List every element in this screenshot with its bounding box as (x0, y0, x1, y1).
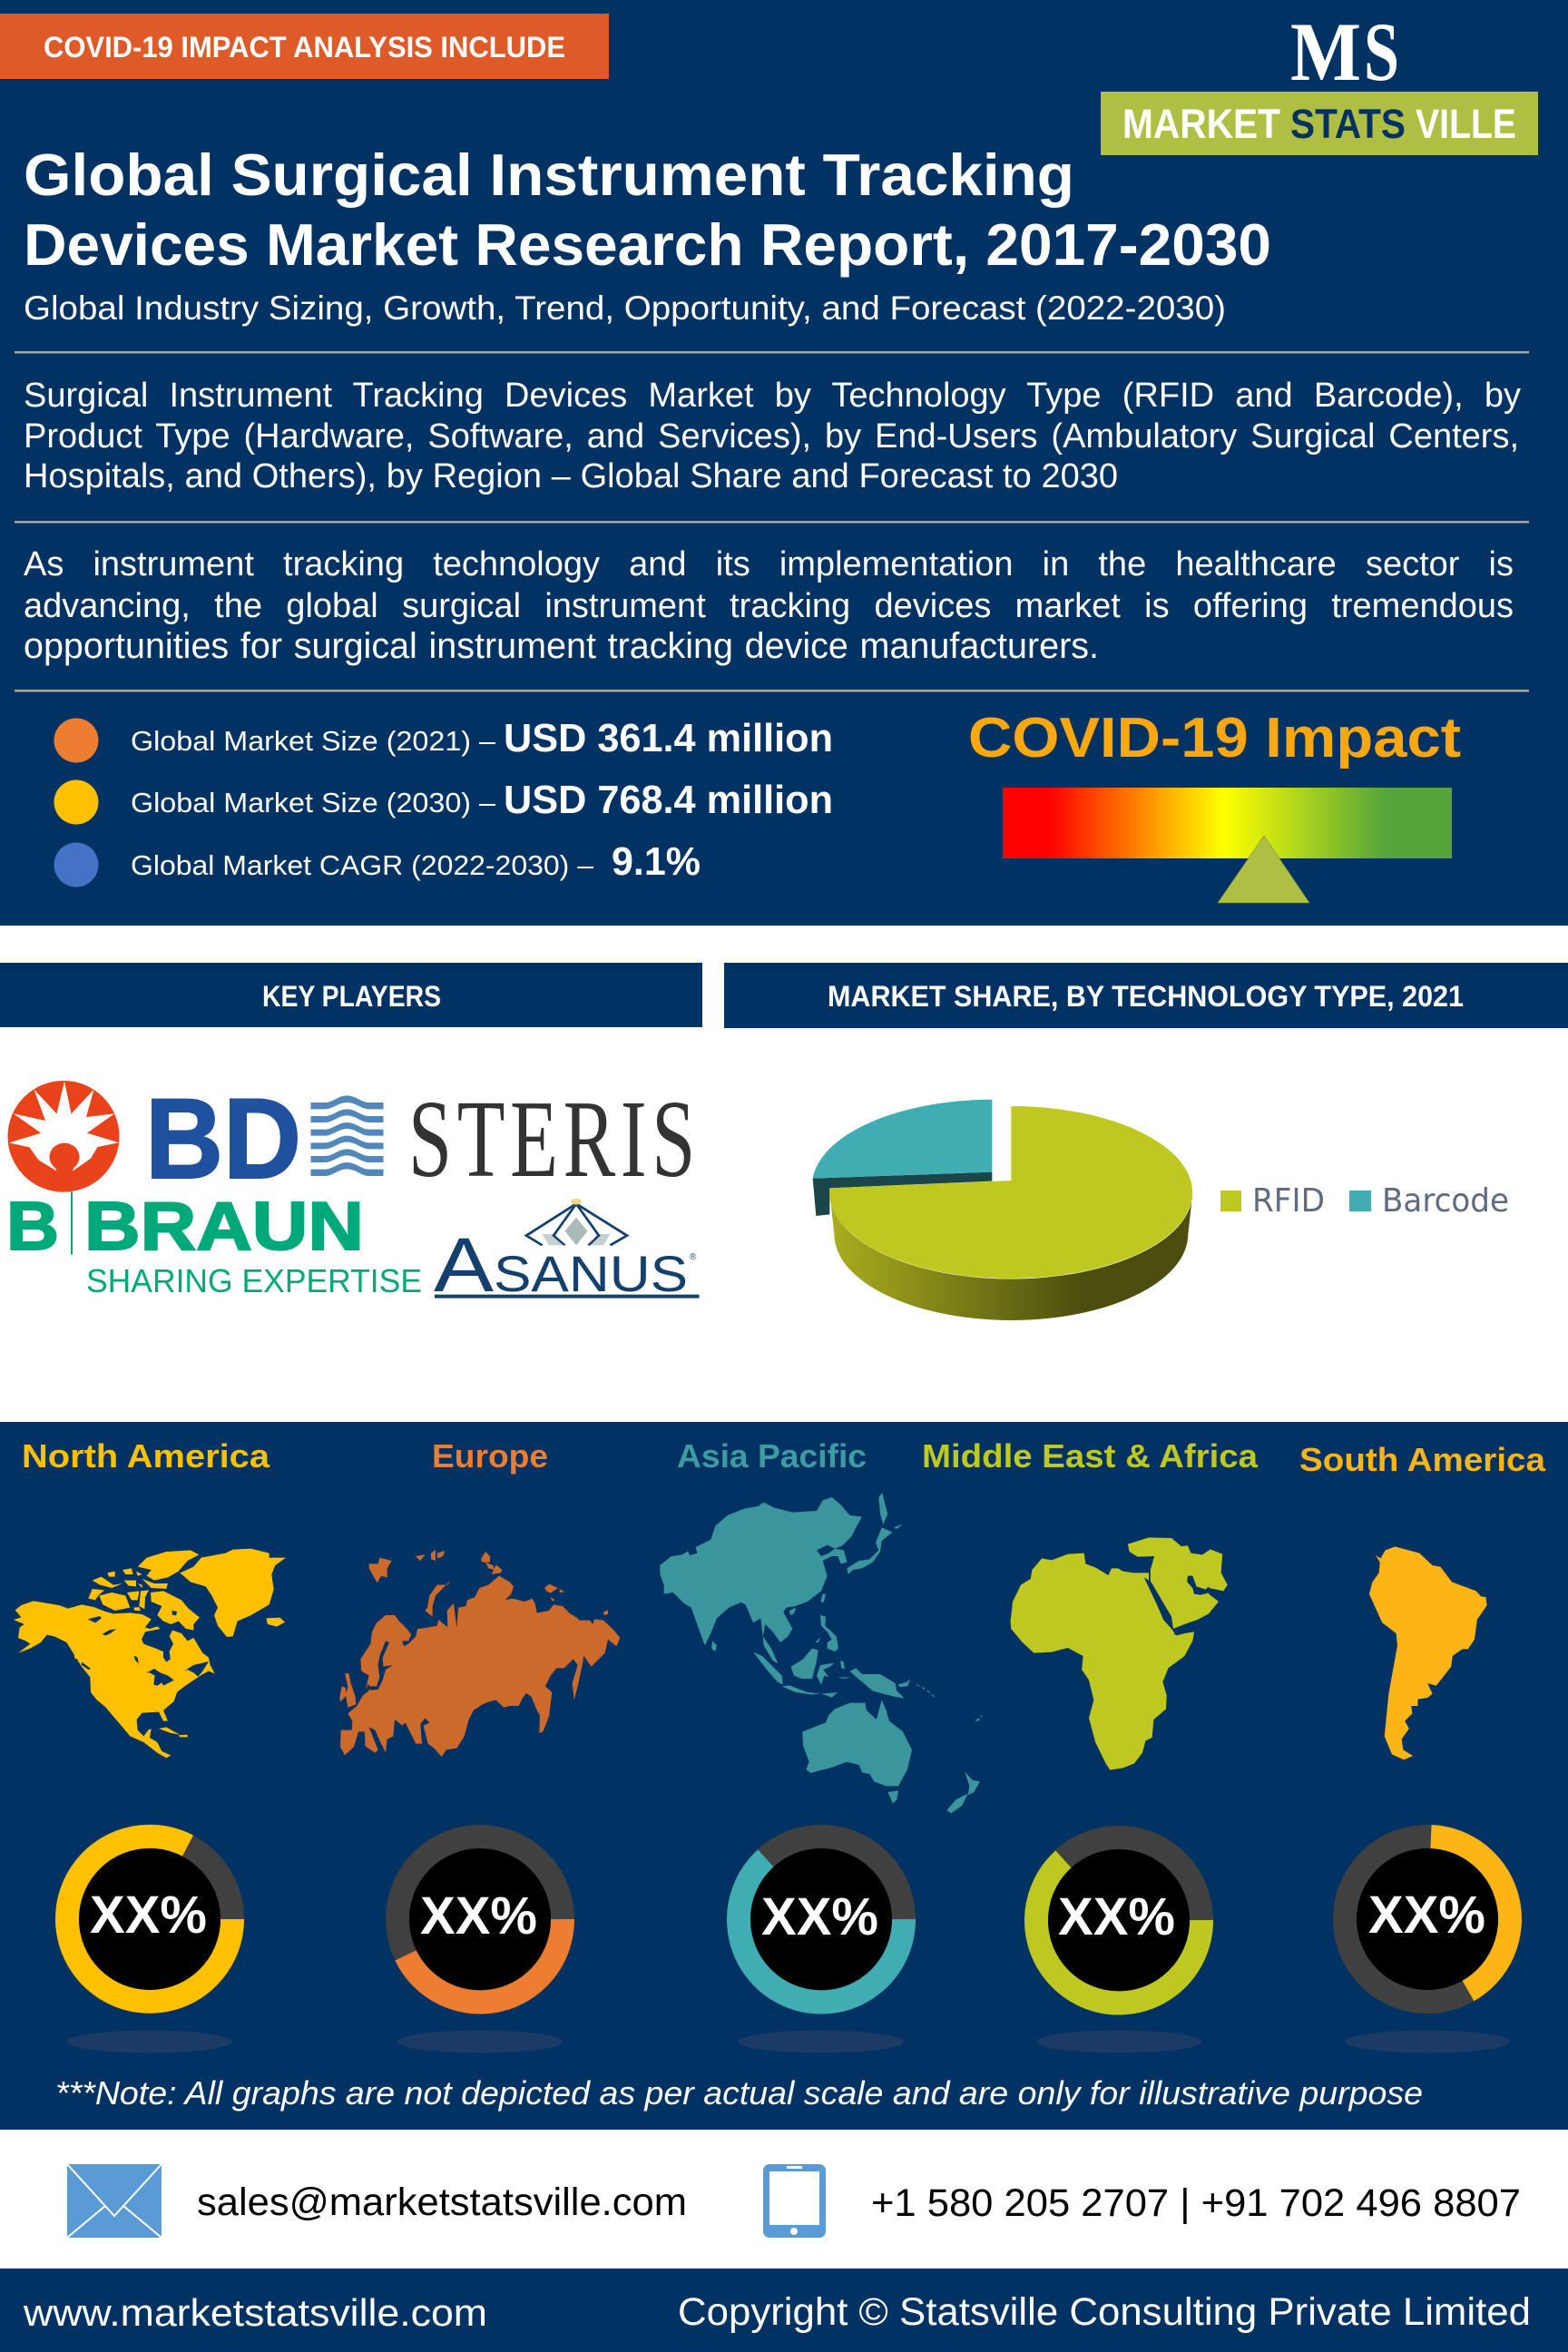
pie slice: Barcode (813, 1100, 992, 1216)
donut: Middle East and Africa (1036, 1838, 1201, 2053)
header bar: key players (0, 963, 702, 1027)
donut: Europe: XX% (420, 1886, 537, 1945)
note: ***Note: All graphs are not depicted as per actual scale and are only for illustrative purpose (55, 2074, 1423, 2112)
region: Europe: Europe (432, 1437, 548, 1475)
region: North America (14, 1437, 286, 1758)
covid impact gauge: COVID-19 Impact (968, 707, 1461, 769)
logo: Market Stats Ville: S (1364, 5, 1399, 98)
icon: phone (763, 2164, 826, 2238)
text: Hospitals, and Others), by Region – Global Share and Forecast to 2030 (24, 457, 1118, 495)
text: As instrument tracking technology and its implementation in the healthcare sector is (24, 545, 1514, 583)
region: Middle East and Africa: Middle East & Africa (922, 1437, 1259, 1475)
text: opportunities for surgical instrument tracking device manufacturers. (24, 626, 1099, 666)
panel: regional background (0, 1422, 1568, 2130)
donut: Asia Pacific: XX% (761, 1887, 878, 1946)
legend: Barcode (1382, 1182, 1509, 1220)
logo: BD (145, 1076, 383, 1202)
banner: covid analysis: COVID-19 IMPACT ANALYSIS INCLUDE (44, 31, 565, 64)
logo: Asanus: A (434, 1222, 494, 1308)
panel: footer: www.marketstatsville.com (23, 2291, 487, 2334)
region: South America (1299, 1441, 1546, 1759)
donut: South America: XX% (1368, 1886, 1485, 1945)
donut: Middle East and Africa: XX% (1058, 1887, 1175, 1946)
donut: North America (67, 1837, 232, 2053)
text block: market summary (24, 545, 1514, 666)
logo: B Braun wordmark (6, 1188, 422, 1299)
legend: RFID (1252, 1182, 1325, 1220)
stat: CAGR (54, 839, 701, 887)
stats: market size list (54, 716, 833, 887)
panel: header background (0, 0, 1568, 926)
banner: covid analysis (0, 14, 609, 79)
chart: 3D pie market share (813, 1100, 1509, 1320)
logo: Market Stats Ville: VILLE (1416, 101, 1516, 147)
region: Asia Pacific (660, 1437, 983, 1813)
region: Asia Pacific: Asia Pacific (677, 1437, 867, 1475)
region: Middle East and Africa (922, 1437, 1259, 1770)
stat: market size 2021: USD 361.4 million (504, 716, 833, 760)
donut: Asia Pacific (739, 1837, 904, 2053)
stat: market size 2030 (54, 778, 833, 824)
email: sales@marketstatsville.com (197, 2180, 687, 2224)
logo: Market Stats Ville: MARKET (1122, 101, 1280, 147)
logo: Market Stats Ville (1101, 5, 1538, 155)
covid impact gauge (968, 707, 1461, 903)
header bar: market share (724, 963, 1568, 1028)
stat: CAGR: Global Market CAGR (2022-2030) – (131, 849, 594, 881)
panel: footer: Copyright © Statsville Consulting Private Limited (678, 2290, 1531, 2334)
stat: market size 2030: Global Market Size (2030) – (131, 787, 496, 818)
stat: market size 2030: USD 768.4 million (504, 778, 833, 822)
logo: Asanus: SANUS (494, 1245, 688, 1302)
stat: CAGR: 9.1% (612, 839, 701, 884)
text: advancing, the global surgical instrument tracking devices market is offering tremendous (24, 587, 1514, 625)
header bar: key players: KEY PLAYERS (262, 980, 441, 1013)
logo: B Braun wordmark: SHARING EXPERTISE (86, 1262, 422, 1299)
logo: BD: BD (145, 1076, 301, 1202)
region: Europe (339, 1437, 620, 1757)
logo: Asanus: ® (690, 1252, 697, 1262)
text block: market scope (24, 377, 1521, 495)
stat: market size 2021: Global Market Size (2021) – (131, 725, 496, 757)
subtitle: Global Industry Sizing, Growth, Trend, Opportunity, and Forecast (2022-2030) (24, 289, 1226, 327)
text: Product Type (Hardware, Software, and Services), by End-Users (Ambulatory Surgical Centers, (24, 417, 1519, 456)
region: South America: South America (1299, 1441, 1546, 1478)
title: Global Surgical Instrument Tracking (24, 142, 1074, 208)
phone numbers: +1 580 205 2707 | +91 702 496 8807 (871, 2181, 1521, 2225)
panel: contact strip (0, 2130, 1568, 2269)
stat: market size 2021 (54, 716, 833, 762)
title: Devices Market Research Report, 2017-2030 (24, 211, 1271, 278)
donut: North America: XX% (90, 1886, 207, 1945)
panel: footer (0, 2269, 1568, 2352)
legend (1220, 1182, 1509, 1220)
header bar: market share: MARKET SHARE, BY TECHNOLOGY TYPE, 2021 (828, 980, 1464, 1013)
title (24, 142, 1271, 278)
logo: B Braun wordmark: BRAUN (84, 1188, 364, 1264)
logo: STERIS: STERIS (408, 1078, 701, 1200)
donut: South America (1345, 1837, 1510, 2053)
logo: Market Stats Ville: STATS (1290, 101, 1406, 147)
logo: Asanus (434, 1199, 699, 1308)
pie slice: RFID (829, 1106, 1192, 1320)
text: Surgical Instrument Tracking Devices Market by Technology Type (RFID and Barcode), by (24, 377, 1521, 415)
panel: key player logos (6, 1076, 701, 1308)
logo: Market Stats Ville: M (1290, 5, 1361, 98)
logo: B. Braun sun (7, 1081, 120, 1255)
icon: envelope (67, 2164, 162, 2238)
donut: Europe (397, 1837, 563, 2053)
logo: B Braun wordmark: B (6, 1188, 59, 1264)
region: North America: North America (22, 1437, 270, 1475)
